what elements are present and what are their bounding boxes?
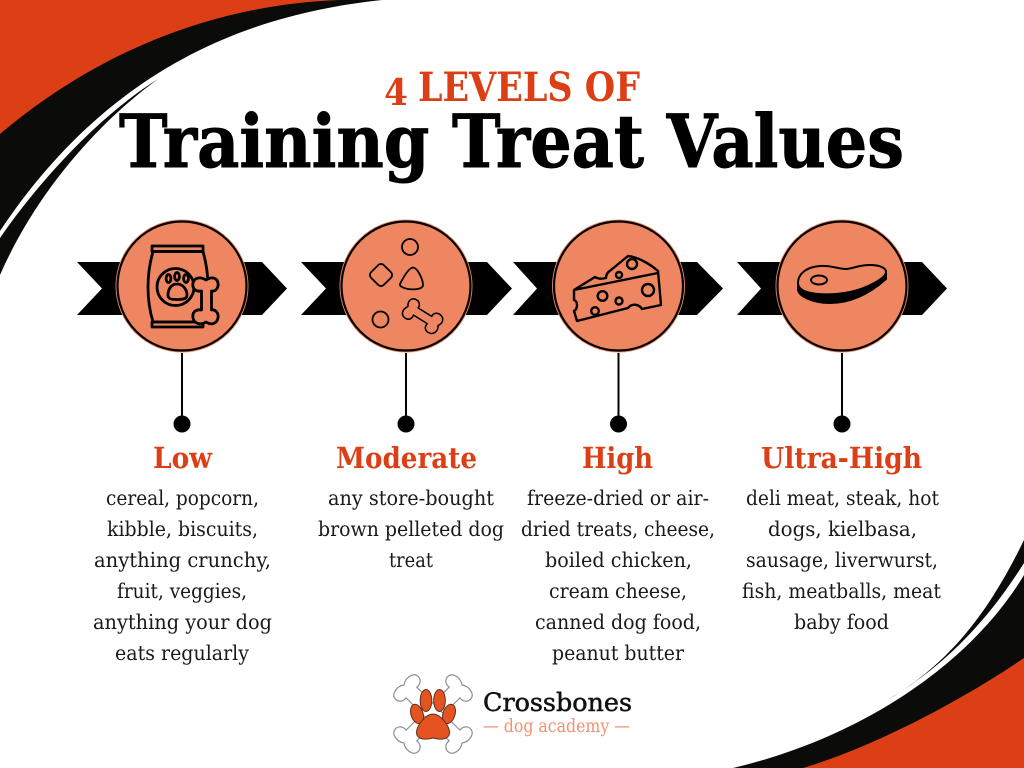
top-left corner swoosh [0,0,382,275]
circle: low [116,220,248,352]
logo wordmark: Crossbones [483,688,632,717]
text: ultra-high: fish, meatballs, meat [742,579,942,603]
text: moderate: brown pelleted dog [318,517,504,541]
text: high: freeze-dried or air- [527,486,709,510]
text: high: canned dog food, [535,610,701,634]
text: high [521,486,715,665]
text: ultra-high [742,486,942,634]
arrow: high [513,262,723,315]
arrow: low [77,262,287,315]
subtitle: 4 levels of: 4 [384,72,408,114]
icon: dog food bag [148,246,218,327]
circle: high [552,220,685,352]
main title: Training Treat Values [119,99,904,185]
text: low [93,486,272,665]
text: high: dried treats, cheese, [521,517,715,541]
circle: moderate [340,220,472,352]
panel: low [77,220,287,665]
icon: cheese [574,256,661,321]
stem and dot: moderate [398,353,414,432]
heading: ultra-high: Ultra-High [761,441,922,475]
text: low: kibble, biscuits, [107,517,258,541]
icon: crossed bones with paw [391,672,475,756]
text: ultra-high: baby food [794,610,889,634]
logo tagline: — dog academy — [483,715,630,737]
text: low: anything your dog [93,610,272,634]
arrow: ultra-high [737,262,947,315]
stem and dot: ultra-high [834,353,850,432]
text: moderate: any store-bought [328,486,495,510]
stem and dot: low [174,353,190,432]
text: high: boiled chicken, [545,548,692,572]
text: low: anything crunchy, [94,548,271,572]
text: low: cereal, popcorn, [106,486,259,510]
logo: crossbones dog academy [391,672,632,756]
text: ultra-high: sausage, liverwurst, [746,548,938,572]
panel: moderate [301,220,512,572]
icon: steak [798,265,886,303]
panel: ultra-high [737,220,947,634]
heading: high: High [582,441,653,475]
icon: assorted treats [368,239,445,336]
text: moderate [318,486,504,572]
stem and dot: high [610,353,627,432]
text: low: fruit, veggies, [117,579,247,603]
heading: moderate: Moderate [336,441,477,475]
text: low: eats regularly [115,641,249,665]
text: ultra-high: deli meat, steak, hot [746,486,940,510]
arrow: moderate [301,262,512,315]
circle: ultra-high [776,220,908,352]
subtitle: 4 levels of: LEVELS OF [418,64,640,111]
text: high: peanut butter [552,641,684,665]
text: ultra-high: dogs, kielbasa, [768,517,917,541]
heading: low: Low [153,441,213,475]
text: moderate: treat [389,548,434,572]
panel: high [513,220,723,665]
text: high: cream cheese, [549,579,687,603]
bottom-right corner swoosh [733,540,1024,768]
title [119,64,904,185]
